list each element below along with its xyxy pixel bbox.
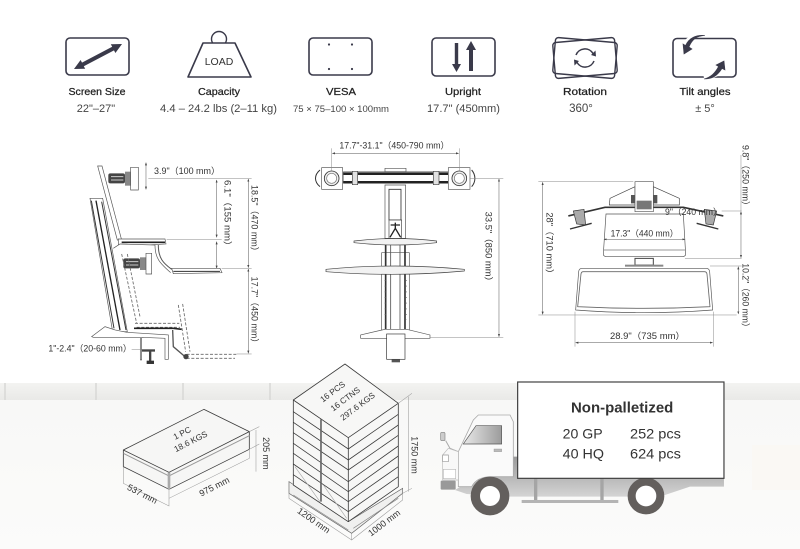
carton label: 1 PC [171,424,192,442]
pallet dimensions [289,393,419,540]
truck with loading quantities [441,382,724,511]
top view: dimensions: 28"（710 mm） [545,212,555,278]
top view: dimensions: 17.3"（440 mm） [611,229,678,239]
icon: tilt arrows [673,35,736,79]
cargo box with quantities: Non-palletized [571,401,673,417]
top view: lower desk surface [576,258,713,313]
front view: dimensions: 33.5"（850 mm） [483,212,493,286]
side view: dimensions [48,163,259,354]
cargo box with quantities: 624 pcs [630,445,681,461]
palletized stack with dimensions [289,364,419,540]
spec: screen size [66,38,129,115]
side view: dashed lowered position [122,254,237,358]
pallet label: 16 CTNS [328,384,362,413]
pallet dimensions: 1000 mm [366,508,402,538]
icon: VESA hole pattern [309,38,372,75]
carton dimensions: 205 mm [261,437,271,470]
spec: screen size: Screen Size [68,86,126,98]
diagram: side view with dimensions [48,163,259,364]
spec: tilt angles: ± 5° [695,103,715,115]
pallet label: 16 PCS [318,379,347,404]
spec: upright [427,38,500,115]
pallet label [318,379,377,423]
side view: dimensions: 18.5"（470 mm） [249,185,259,256]
side view: upper monitor mount [108,167,138,190]
side view: dimensions: 17.7"（450 mm） [249,277,259,347]
side view: upper shelf and keyboard tray [113,239,222,274]
carton dimensions: 975 mm [198,475,231,498]
front view: dimensions: 17.7"-31.1"（450-790 mm） [339,140,449,150]
spec: rotation: 360° [569,103,593,115]
cargo box with quantities: 252 pcs [630,425,681,441]
top view: crossbar with mounts [568,182,723,229]
truck wheels [475,481,660,511]
top view: upper shelf [603,214,686,257]
icon: load weight: LOAD [205,56,234,68]
spec: tilt angles [673,35,736,115]
side view: dimensions: 3.9"（100 mm） [154,166,220,176]
single carton with dimensions [123,409,271,506]
spec: rotation: Rotation [563,86,607,98]
spec: VESA: VESA [326,86,356,98]
carton box [123,409,249,489]
front view: base and clamp [361,329,430,362]
top view: dimensions: 10.2"（260 mm） [741,263,751,332]
icon: diagonal arrow in screen [66,38,129,75]
carton dimensions: 537 mm [126,482,159,506]
side view: upper post and column [90,166,127,332]
side view: lower monitor mount [123,253,152,274]
cargo box with quantities: 40 HQ [563,445,604,461]
carton label: 18.6 KGS [172,428,209,454]
cargo box with quantities: 20 GP [563,425,603,441]
side view: dimensions: 6.1"（155 mm） [222,180,232,251]
pallet label: 297.6 KGS [338,390,377,423]
front view: dimensions [332,140,503,337]
spec: capacity: Capacity [198,86,241,98]
pallet dimensions: 1200 mm [295,506,332,535]
spec: tilt angles: Tilt angles [680,86,730,98]
spec: rotation [553,37,617,115]
spec: VESA: 75 × 75–100 × 100mm [293,104,389,115]
side view: base and clamp [92,327,189,364]
spec: screen size: 22"–27" [77,103,115,115]
top view: dimensions: 9"（240 mm） [665,207,722,217]
truck chassis [455,457,724,503]
spec: upright: Upright [445,86,481,98]
carton dimensions [123,427,271,506]
top view: dimensions: 9.8"（250 mm） [741,145,751,210]
stacked cartons [293,364,398,522]
cargo box with quantities [518,382,724,478]
pallet base [289,482,403,533]
spec: VESA [293,38,389,115]
diagram: front view with dimensions [315,140,503,362]
spec: upright: 17.7" (450mm) [427,103,500,115]
top view: dimensions: 28.9"（735 mm） [610,331,685,341]
diagram: top view with dimensions [538,145,751,347]
side view: dimensions: 1"-2.4"（20-60 mm） [48,344,132,354]
front view: shelves [326,238,464,274]
front view: crossbar with monitor plates [315,168,475,189]
icon: up and down arrows [432,38,495,76]
icon: rotating screens [553,37,617,79]
front view: column and brackets [382,185,409,330]
spec: capacity [160,32,277,115]
spec: capacity: 4.4 – 24.2 lbs (2–11 kg) [160,103,277,115]
truck cab [441,415,513,490]
top view: dimensions [538,145,751,347]
pallet dimensions: 1750 mm [409,436,419,474]
